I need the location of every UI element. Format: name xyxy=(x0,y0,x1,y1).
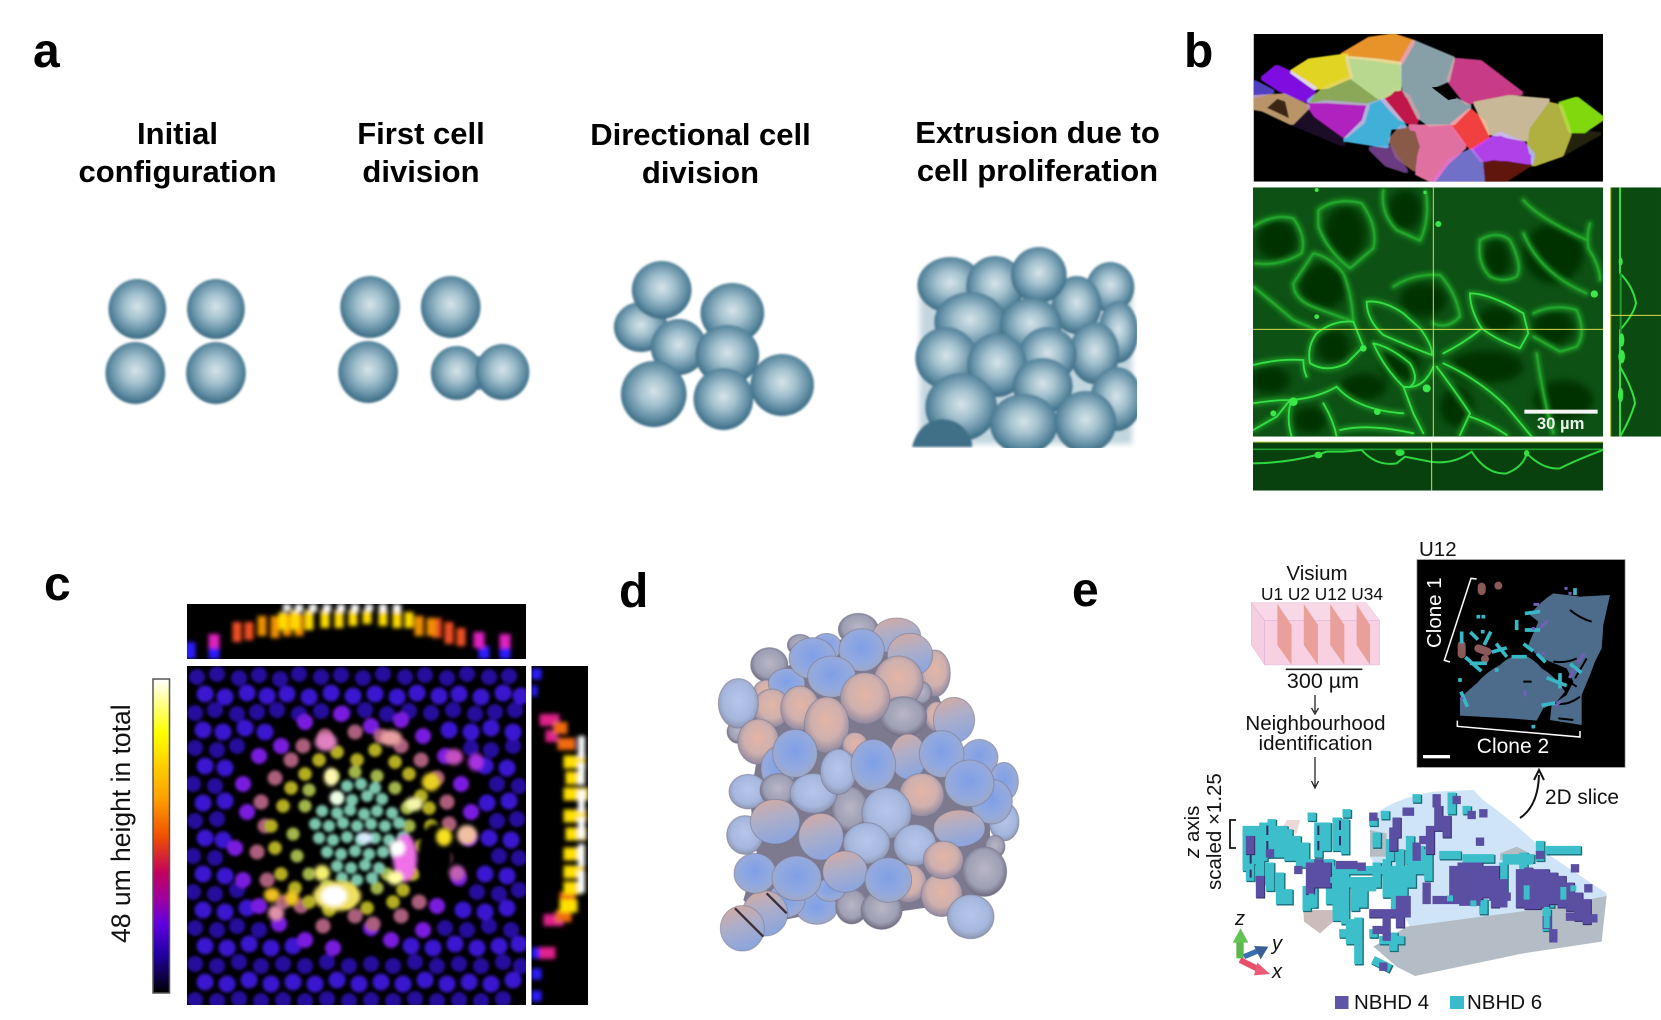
cells: first division xyxy=(338,276,529,403)
Visium text: U1 U2 U12 U34 xyxy=(1261,584,1383,604)
axes icon xyxy=(1233,928,1270,975)
right projection xyxy=(532,666,588,1005)
2D slice text: 2D slice xyxy=(1545,786,1619,809)
3D voxel reconstruction xyxy=(1247,790,1607,976)
panel a: cell division stages xyxy=(33,25,1160,454)
panel d: 3D cell cluster xyxy=(718,613,1019,951)
arrow: to 3D reconstruction xyxy=(1312,757,1318,788)
panel e label: e xyxy=(1072,564,1099,617)
axis letters xyxy=(1234,908,1283,983)
Visium block xyxy=(1251,603,1380,669)
brighter blue nuclei xyxy=(203,693,521,984)
scaled text: scaled ×1.25 xyxy=(1203,773,1226,890)
panel d label: d xyxy=(619,565,648,618)
cells: directional division xyxy=(614,261,814,430)
purple ring xyxy=(235,714,471,948)
label c: c xyxy=(44,558,71,611)
arrow: 2D slice xyxy=(1520,770,1544,818)
dark gap xyxy=(418,824,452,888)
slice scale bar xyxy=(1423,755,1450,758)
panel c: height-coded nuclei xyxy=(44,558,588,1005)
Visium text: Visium xyxy=(1286,562,1348,585)
clone brackets xyxy=(1444,578,1580,737)
heading: extrusion: Extrusion due to xyxy=(915,115,1160,150)
Visium text xyxy=(1261,562,1383,693)
heading: initial configuration: Initial xyxy=(137,116,218,151)
axis letters: x xyxy=(1271,961,1283,983)
arrow: to neighbourhood identification xyxy=(1312,695,1318,714)
outer blue nuclei xyxy=(193,674,521,1001)
heading: directional cell division: Directional cell xyxy=(590,117,811,152)
hot spots xyxy=(264,730,484,921)
confocal xy view xyxy=(1250,187,1603,437)
heading: directional cell division: division xyxy=(642,155,759,190)
U12 title: U12 xyxy=(1419,538,1457,561)
legend: NBHD 4 xyxy=(1354,991,1429,1014)
main projection: nuclei xyxy=(187,666,526,1005)
scale bar xyxy=(1524,410,1598,414)
heading: initial configuration: configuration xyxy=(78,154,277,189)
cells: extrusion xyxy=(912,247,1142,454)
green-yellow nuclei xyxy=(293,772,409,888)
neighbourhood text: Neighbourhood xyxy=(1245,712,1386,735)
panel b: segmented 3D and confocal views xyxy=(1250,34,1661,491)
confocal xz view xyxy=(1253,442,1603,491)
panel e: spatial reconstruction xyxy=(1181,538,1625,1014)
panel b label: b xyxy=(1184,25,1213,78)
legend xyxy=(1335,991,1542,1014)
scale bar text: 30 µm xyxy=(1537,414,1584,433)
heading: first cell division: division xyxy=(362,154,480,189)
top projection xyxy=(187,604,526,659)
confocal yz view xyxy=(1610,187,1661,437)
pink and tan nuclei xyxy=(257,732,449,926)
heading: extrusion: cell proliferation xyxy=(917,153,1158,188)
cluster backing xyxy=(743,637,990,923)
clone 2 text: Clone 2 xyxy=(1477,735,1549,758)
colour bar xyxy=(153,679,170,993)
teal centre nuclei xyxy=(315,784,403,880)
yellow nuclei xyxy=(271,750,431,910)
U12 slice panel xyxy=(1417,560,1625,767)
axis letters: z xyxy=(1234,908,1245,930)
3D segmented cell surface xyxy=(1254,34,1603,182)
z-axis bracket xyxy=(1230,820,1236,848)
clone 1 text: Clone 1 xyxy=(1423,577,1446,648)
Visium text: 300 µm xyxy=(1287,669,1359,693)
heading: first cell division: First cell xyxy=(357,116,485,151)
label a: a xyxy=(33,25,60,78)
colour bar title: 48 um height in total xyxy=(106,704,136,943)
axis letters: y xyxy=(1270,933,1283,955)
legend: NBHD 6 xyxy=(1467,991,1542,1014)
z axis text: z axis xyxy=(1181,806,1204,859)
neighbourhood text: identification xyxy=(1259,732,1372,755)
cells: initial configuration xyxy=(105,279,246,404)
